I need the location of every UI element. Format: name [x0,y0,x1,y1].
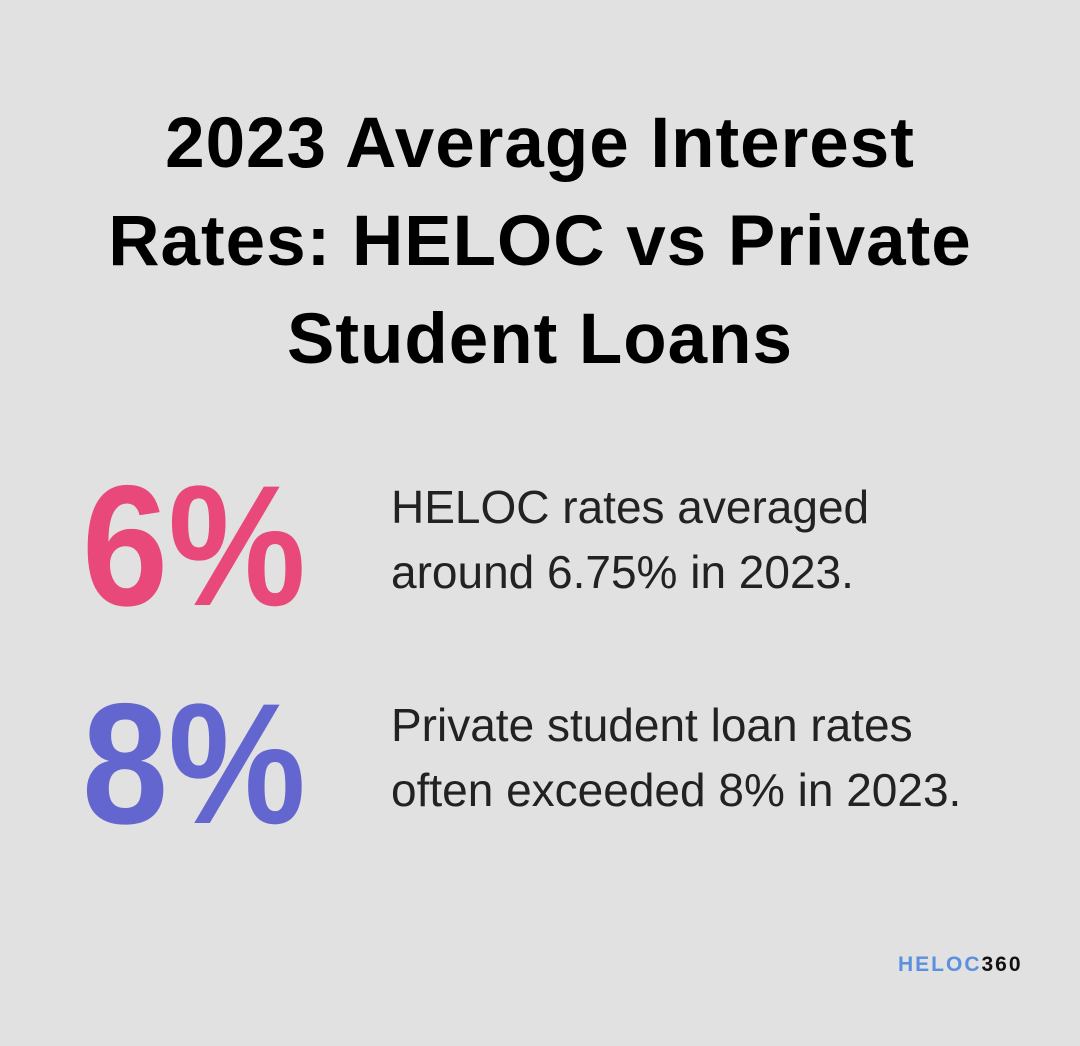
text: private loans: often exceeded 8% in 2023. [391,764,961,816]
title: Student Loans [287,300,793,379]
text: private loans: Private student loan rates [391,699,913,751]
title [108,104,972,379]
stat: 6%: 6% [82,450,306,642]
text: HELOC [391,481,869,598]
text: private loans [391,699,961,816]
text: HELOC: HELOC rates averaged [391,481,869,533]
title: 2023 Average Interest [165,104,915,183]
logo: HELOC360 [898,953,1023,976]
title: Rates: HELOC vs Private [108,202,972,281]
stat: 8%: 8% [82,668,306,860]
text: HELOC: around 6.75% in 2023. [391,546,854,598]
